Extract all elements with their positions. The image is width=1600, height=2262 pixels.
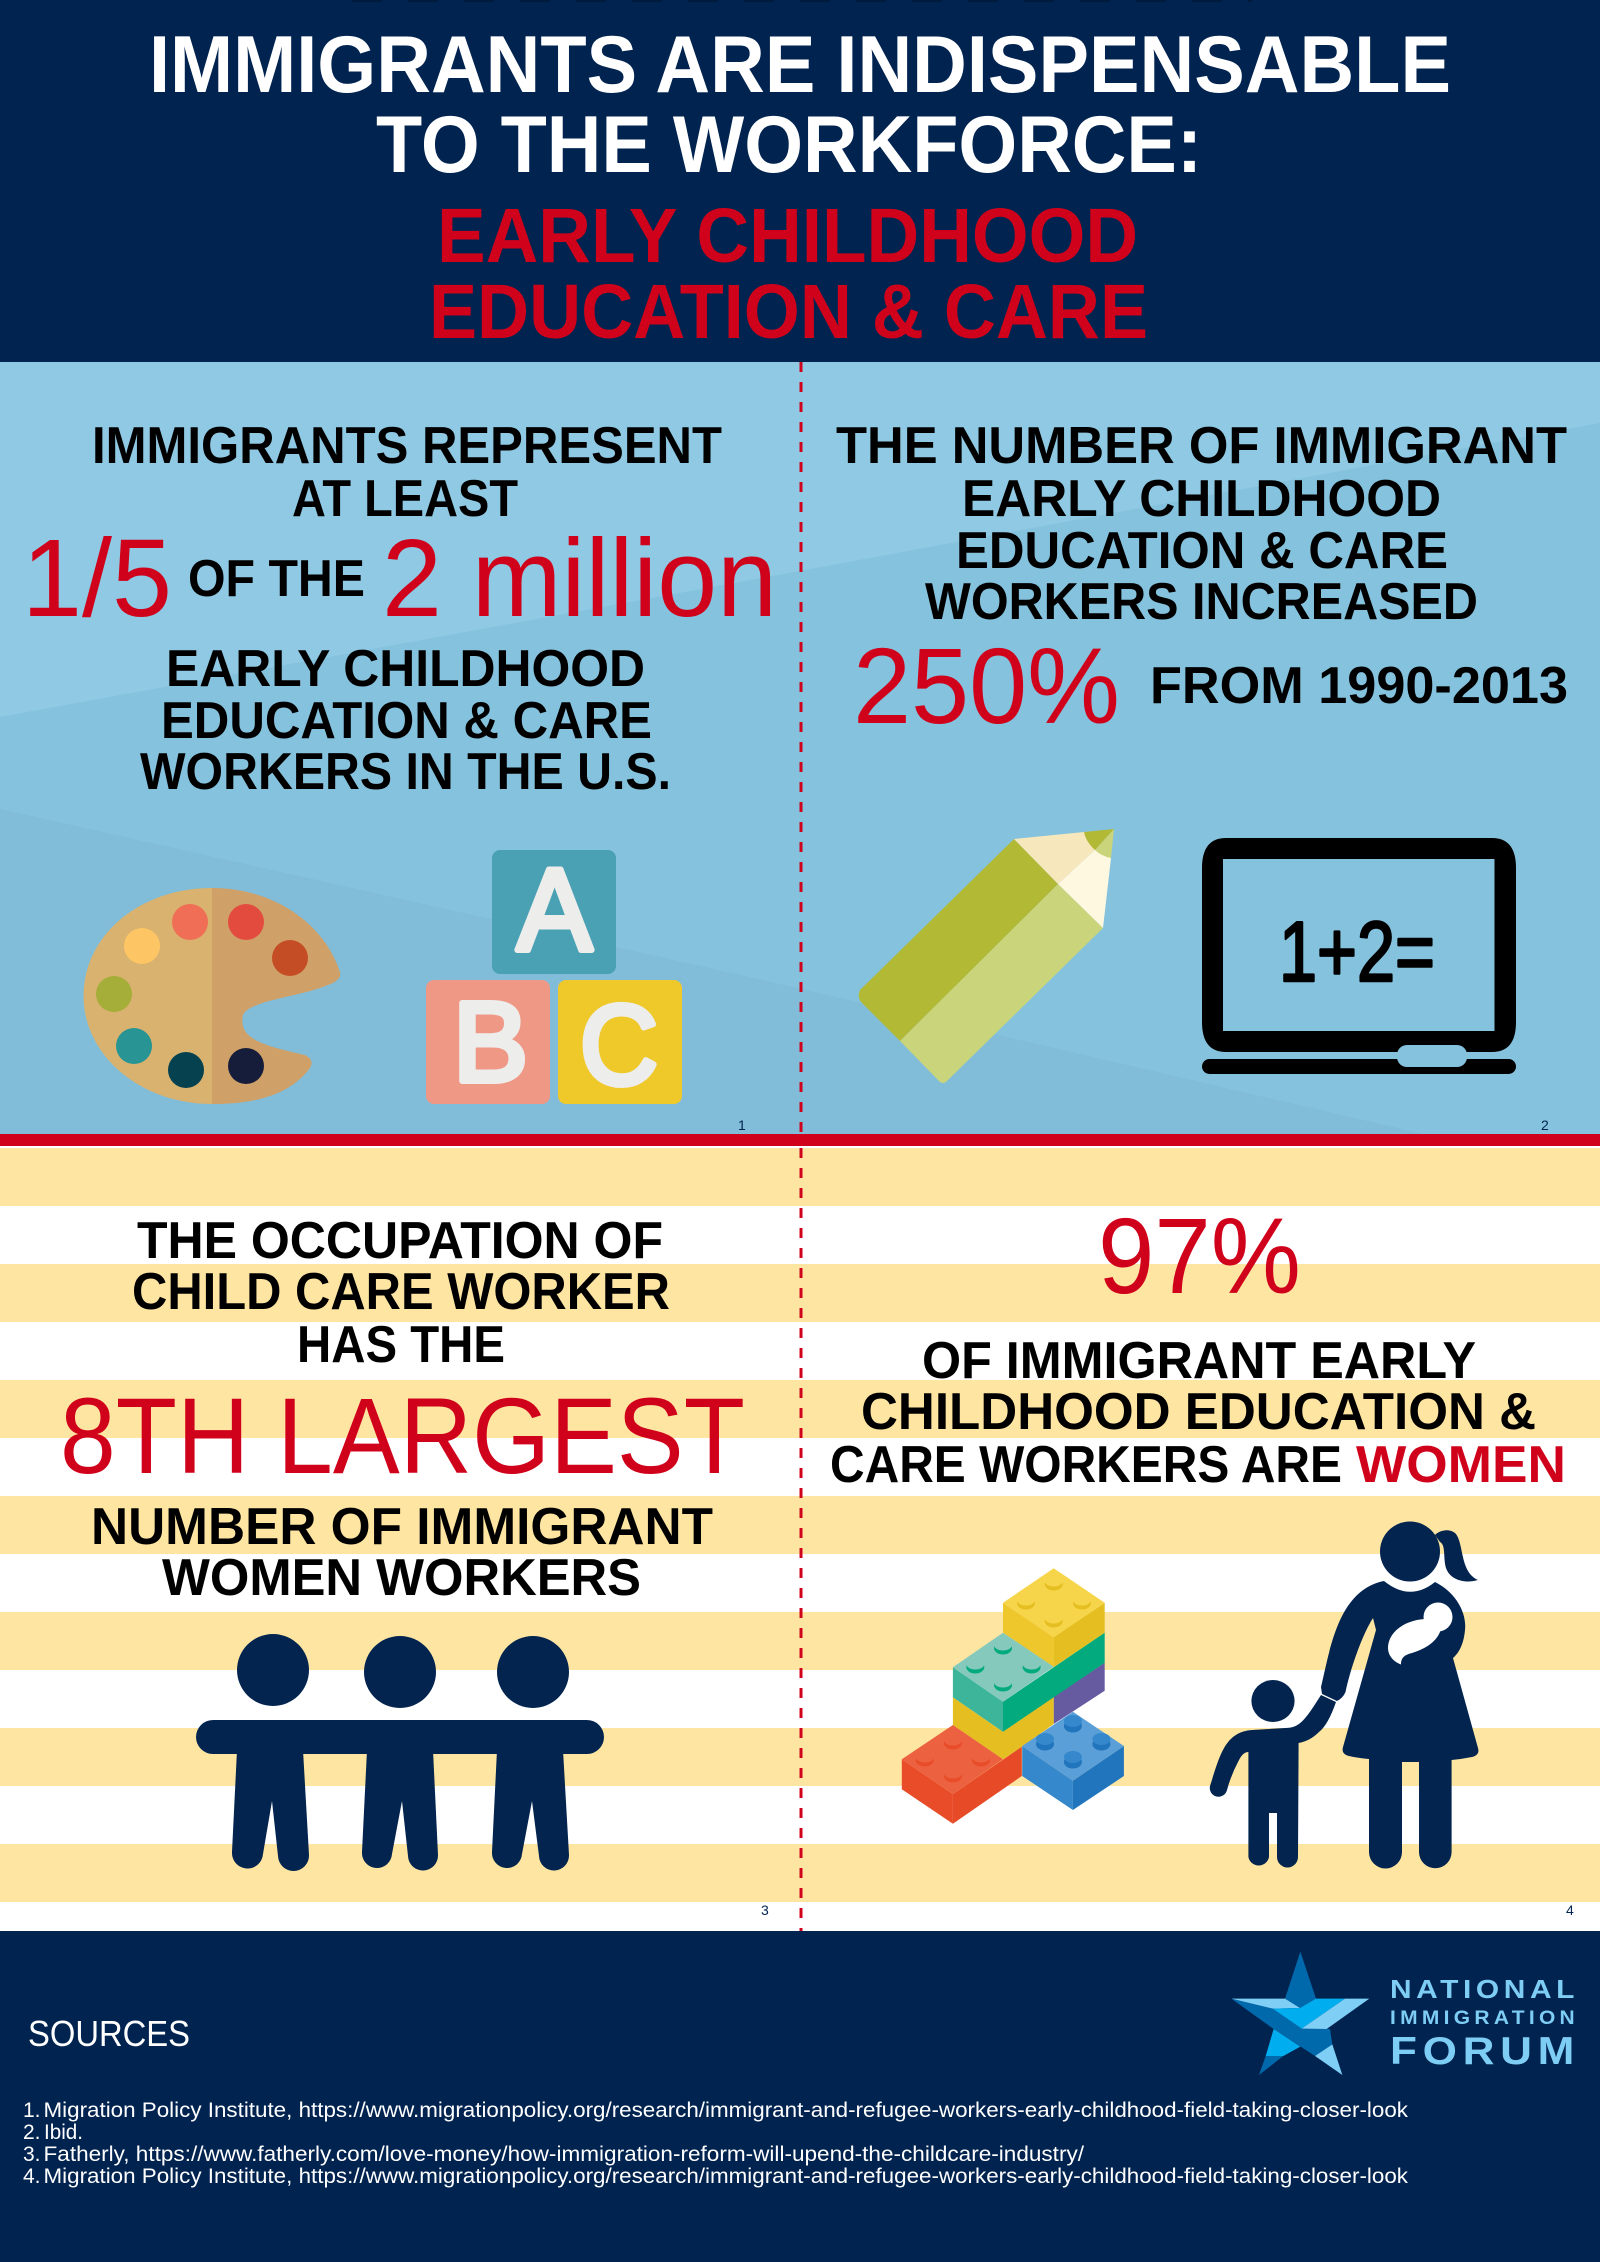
statistic text 4: CHILDHOOD EDUCATION &: [861, 1383, 1536, 1441]
header: title: TO THE WORKFORCE:: [376, 100, 1202, 190]
statistic text 1: EDUCATION & CARE: [161, 692, 652, 750]
panel 1: one fifth of workers: [22, 417, 777, 1133]
sources list: 2.: [23, 2121, 41, 2144]
statistic text 4: [830, 1195, 1566, 1494]
statistic text 3: NUMBER OF IMMIGRANT: [91, 1498, 713, 1556]
header: title: EARLY CHILDHOOD: [437, 193, 1138, 279]
sources list: Fatherly, https://www.fatherly.com/love-money/how-immigration-reform-will-upend-the-childcare-industry/: [44, 2143, 1084, 2166]
icon: alphabet blocks: [426, 844, 682, 1108]
statistic text 2: EDUCATION & CARE: [956, 522, 1448, 580]
footnote 1: 1: [738, 1117, 746, 1133]
statistic text 3: HAS THE: [297, 1316, 505, 1374]
statistic text 4: OF IMMIGRANT EARLY: [922, 1332, 1476, 1390]
statistic text 2: WORKERS INCREASED: [925, 573, 1478, 631]
logo wordmark: IMMIGRATION: [1390, 2007, 1579, 2029]
statistic text 1: 2 million: [382, 517, 777, 640]
statistic text 1: AT LEAST: [292, 470, 518, 528]
sources list: Migration Policy Institute, https://www.migrationpolicy.org/research/immigrant-and-refugee-workers-early-childhood-field-taking-closer-look: [44, 2099, 1409, 2122]
sources heading: SOURCES: [28, 2013, 190, 2054]
sources list: 3.: [23, 2143, 41, 2166]
panel 4: 97 percent women: [830, 1195, 1574, 1918]
icon: alphabet blocks: C: [580, 982, 658, 1108]
statistic text 3: THE OCCUPATION OF: [137, 1212, 663, 1270]
logo: National Immigration Forum: [1231, 1952, 1580, 2075]
footer: sources: [23, 2013, 1409, 2188]
icon: chalkboard: [1202, 838, 1516, 1074]
icon: logo star: [1231, 1952, 1369, 2075]
icon: toy building bricks: [902, 1568, 1124, 1824]
statistic text 2: 250%: [853, 625, 1120, 746]
sources list: Migration Policy Institute, https://www.migrationpolicy.org/research/immigrant-and-refugee-workers-early-childhood-field-taking-closer-look: [44, 2165, 1409, 2188]
icon: three people linked: [196, 1634, 604, 1871]
statistic text 1: IMMIGRANTS REPRESENT: [92, 417, 722, 475]
statistic text 1: OF THE: [188, 550, 365, 608]
panel: yellow striped background: [0, 1146, 1600, 1931]
header: title: [149, 20, 1451, 355]
statistic text 1: 1/5: [22, 517, 172, 640]
icon: paint palette: [84, 888, 340, 1104]
statistic text 1: [22, 417, 777, 801]
icon: pencil: [859, 829, 1114, 1083]
icon: chalkboard: 1+2=: [1279, 905, 1435, 1000]
sources list: [23, 2099, 1409, 2188]
sources list: Ibid.: [44, 2121, 83, 2144]
statistic text 4: WOMEN: [1356, 1436, 1566, 1494]
statistic text 4: 97%: [1098, 1195, 1301, 1316]
statistic text 1: EARLY CHILDHOOD: [166, 640, 645, 698]
statistic text 3: WOMEN WORKERS: [162, 1549, 641, 1607]
logo wordmark: FORUM: [1390, 2030, 1580, 2073]
header: title: IMMIGRANTS ARE INDISPENSABLE: [149, 20, 1451, 110]
statistic text 1: WORKERS IN THE U.S.: [140, 743, 671, 801]
statistic text 2: THE NUMBER OF IMMIGRANT: [836, 417, 1567, 475]
sources list: 4.: [23, 2165, 41, 2188]
statistic text 2: FROM 1990-2013: [1150, 657, 1568, 715]
panel: blue statistics background: [0, 362, 1600, 1134]
statistic text 2: [836, 417, 1568, 746]
statistic text 2: EARLY CHILDHOOD: [962, 470, 1441, 528]
footnote 3: 3: [761, 1902, 769, 1918]
icon: mother with baby and child: [1210, 1522, 1478, 1868]
statistic text 3: [60, 1212, 745, 1607]
statistic text 4: CARE WORKERS ARE: [830, 1436, 1342, 1494]
statistic text 3: CHILD CARE WORKER: [132, 1263, 670, 1321]
statistic text 3: 8TH LARGEST: [60, 1375, 745, 1496]
icon: alphabet blocks: A: [517, 844, 592, 975]
footnote 4: 4: [1566, 1902, 1574, 1918]
logo wordmark: [1390, 1974, 1580, 2073]
footnote 2: 2: [1541, 1117, 1549, 1133]
panel 3: eighth largest: [60, 1212, 769, 1918]
logo wordmark: NATIONAL: [1390, 1974, 1579, 2004]
sources list: 1.: [23, 2099, 41, 2122]
icon: alphabet blocks: B: [453, 979, 528, 1105]
header: title: EDUCATION & CARE: [429, 269, 1148, 355]
panel 2: 250 percent increase: [836, 417, 1568, 1133]
